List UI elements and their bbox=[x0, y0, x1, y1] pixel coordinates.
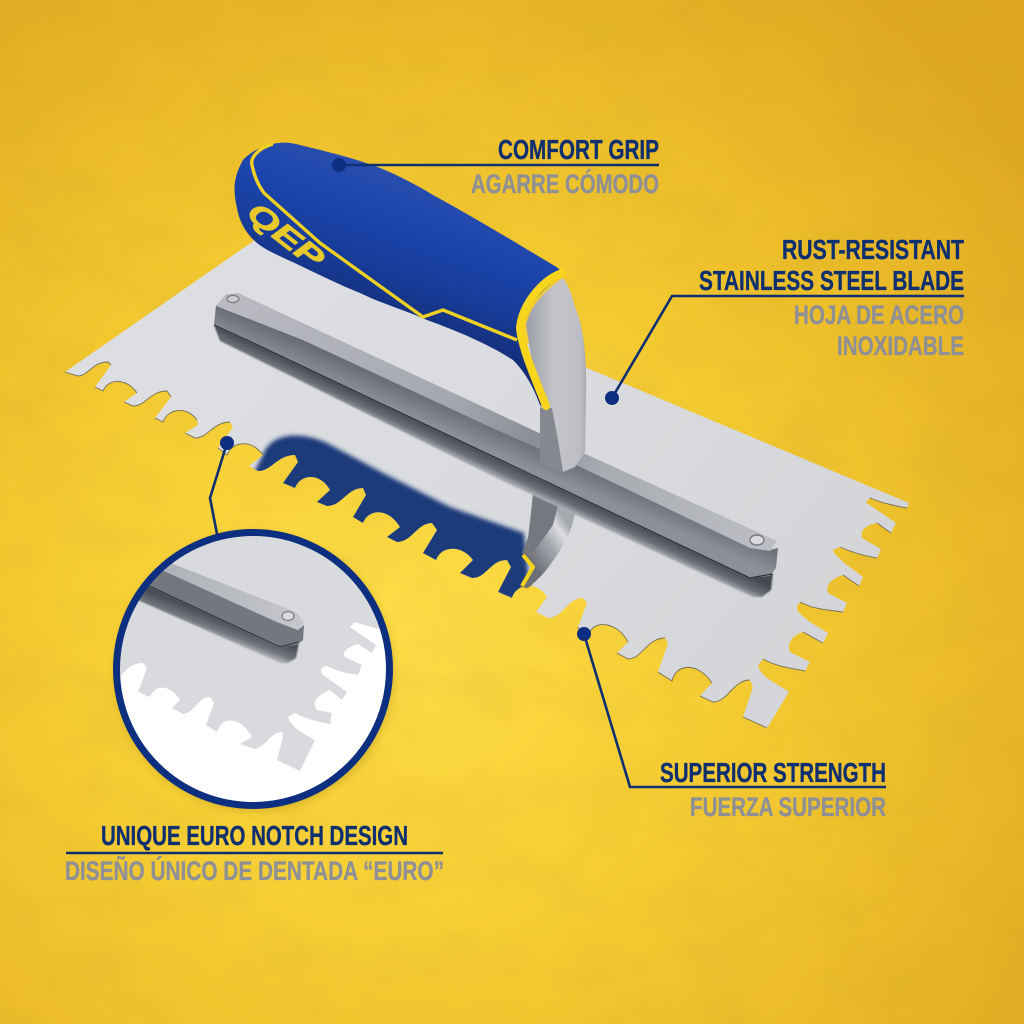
stainless steel blade bbox=[65, 233, 909, 728]
inset blade bbox=[120, 536, 380, 771]
callout leader: comfort grip bbox=[332, 158, 659, 172]
inset bar shadow bbox=[138, 586, 300, 664]
tang bar black seam bbox=[214, 325, 772, 578]
rivet hole right bbox=[750, 535, 764, 545]
label: superior strength: SUPERIOR STRENGTH bbox=[660, 757, 886, 788]
tang bar top face bbox=[216, 293, 777, 551]
label: rust-resistant stainless steel blade: HOJA DE ACERO bbox=[794, 300, 964, 330]
callout leader: superior strength bbox=[577, 627, 886, 787]
inset rivet bbox=[282, 612, 294, 620]
QEP logo: QEP bbox=[241, 196, 330, 276]
label: unique euro notch design: UNIQUE EURO NOTCH DESIGN bbox=[101, 820, 408, 851]
bar reflection shadow bbox=[214, 325, 773, 597]
upper neck bbox=[526, 278, 586, 472]
label: unique euro notch design: DISEÑO ÚNICO DE DENTADA “EURO” bbox=[65, 856, 444, 886]
rivet hole left bbox=[227, 295, 239, 303]
tang bar side face bbox=[214, 305, 778, 578]
label: unique euro notch design bbox=[65, 820, 444, 886]
trowel illustration bbox=[65, 143, 909, 728]
label: superior strength bbox=[660, 757, 886, 822]
yellow accent line bbox=[252, 144, 517, 340]
label: rust-resistant stainless steel blade: INOXIDABLE bbox=[837, 331, 964, 361]
inset bar top bbox=[163, 564, 304, 630]
label: comfort grip bbox=[471, 134, 659, 199]
lower neck reflection bbox=[520, 493, 575, 588]
label: comfort grip: COMFORT GRIP bbox=[498, 134, 659, 165]
inset bar side bbox=[150, 570, 304, 646]
callout leader: euro notch bbox=[210, 436, 234, 534]
inset detail circle bbox=[100, 520, 400, 810]
label: rust-resistant stainless steel blade: RUST-RESISTANT bbox=[782, 234, 964, 265]
notch edge thickness line bbox=[65, 362, 907, 728]
label: comfort grip: AGARRE CÓMODO bbox=[471, 169, 659, 199]
handle reflection on blade bbox=[250, 436, 532, 610]
callout leader: stainless blade bbox=[605, 296, 964, 405]
yellow collar bbox=[520, 273, 562, 406]
blue grip handle bbox=[235, 143, 563, 408]
label: rust-resistant stainless steel blade bbox=[699, 234, 964, 361]
inset bar seam bbox=[148, 586, 298, 648]
label: superior strength: FUERZA SUPERIOR bbox=[690, 792, 886, 822]
